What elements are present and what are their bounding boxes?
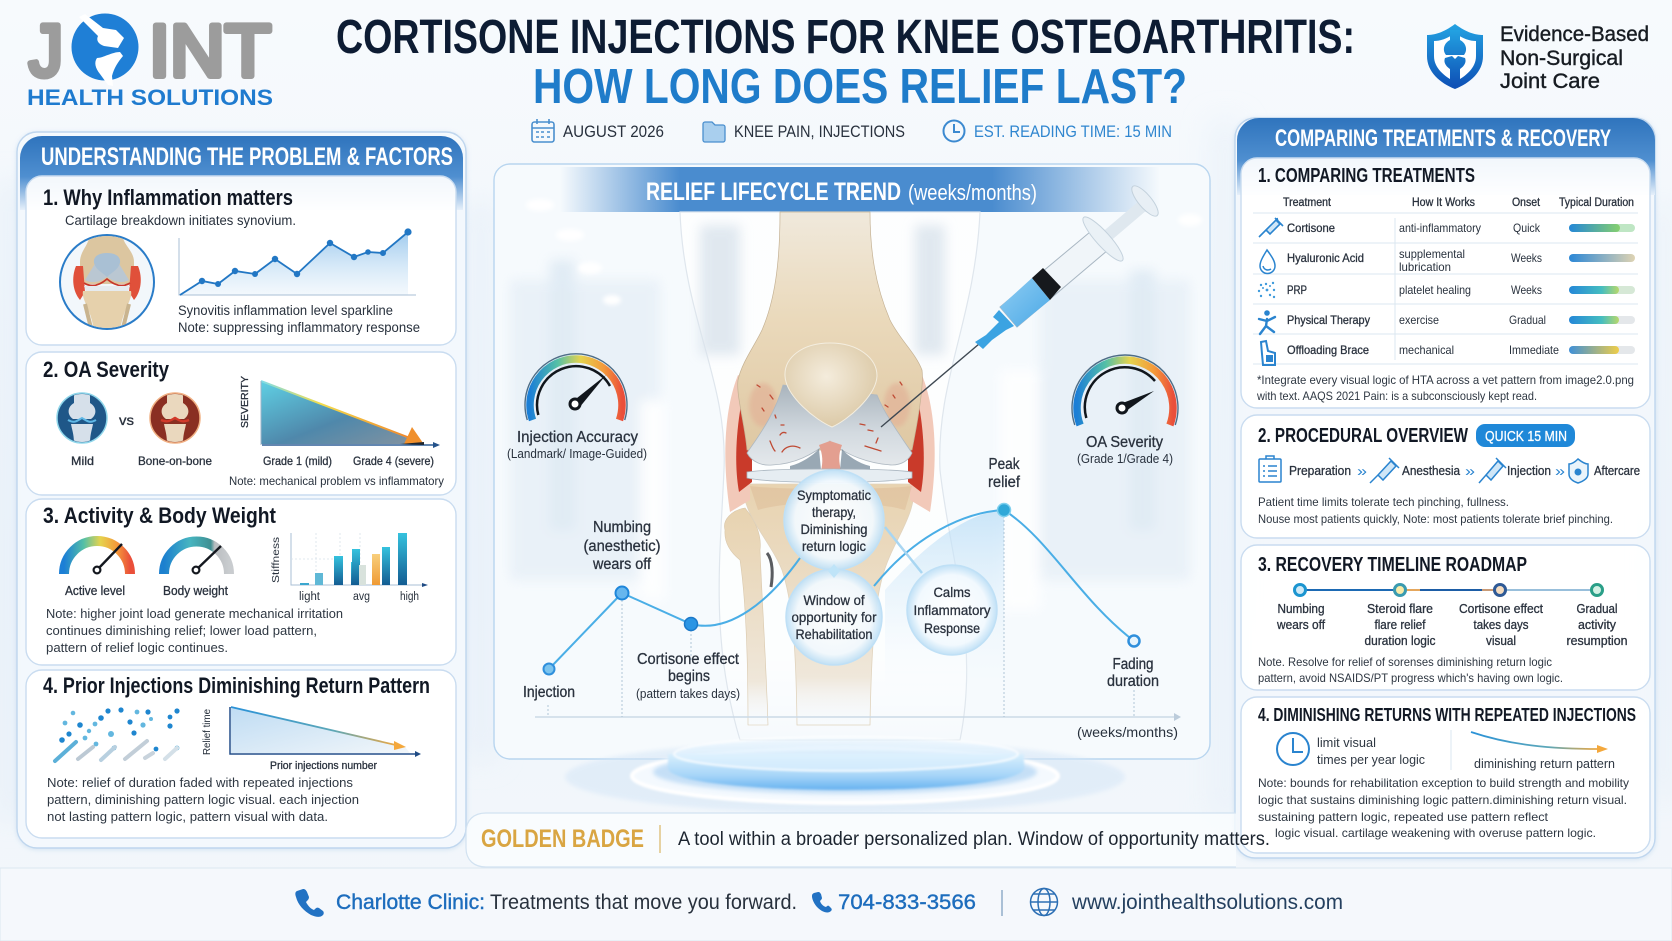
evidence-based badge <box>1427 23 1649 93</box>
label: numbing <box>584 519 660 573</box>
severity axis labels: Grade 1 (mild) <box>263 454 332 468</box>
gauge labels: Active level <box>65 584 125 598</box>
icon: globe <box>1030 888 1058 916</box>
golden badge callout <box>466 813 1270 867</box>
callout bubbles <box>784 470 997 665</box>
icon: clock <box>944 120 964 142</box>
timeline labels: wears off <box>1276 618 1325 632</box>
label: fading duration: duration <box>1107 673 1159 690</box>
bar chart axis labels: light <box>299 591 321 603</box>
activity note <box>46 606 343 655</box>
timeline labels: Steroid flare <box>1367 602 1433 616</box>
row: PRP: platelet healing <box>1399 283 1471 297</box>
knee labels <box>71 454 212 468</box>
severity chart <box>240 376 440 448</box>
row: offloading brace: Offloading Brace <box>1287 343 1369 357</box>
synovium red right <box>908 405 924 492</box>
date: AUGUST 2026 <box>563 123 664 141</box>
timeline labels: takes days <box>1474 618 1528 632</box>
timeline note: Note. Resolve for relief of sorenses diminishing return logic <box>1258 655 1552 669</box>
row: cortisone: Quick <box>1513 221 1541 235</box>
timeline labels: Numbing <box>1278 602 1325 616</box>
lifecycle heading: RELIEF LIFECYCLE TREND <box>646 178 901 206</box>
table column headers: Treatment <box>1283 197 1332 209</box>
fibula <box>724 508 768 725</box>
podium outer halo <box>565 741 1125 813</box>
gauge label: OA severity: (Grade 1/Grade 4) <box>1077 452 1173 466</box>
quick 15 min pill <box>1476 424 1575 447</box>
injection limit text: limit visual <box>1317 735 1376 750</box>
icon: shield with knee <box>1427 24 1483 89</box>
synovium pale left <box>725 375 750 512</box>
trend line <box>549 510 1134 669</box>
syringe liquid <box>1000 278 1050 327</box>
icon: folder <box>703 122 725 142</box>
bar chart: load level <box>271 533 428 587</box>
syringe flange <box>1078 213 1128 265</box>
label: cortisone effect <box>636 651 740 701</box>
bar chart: load level: Stiffness <box>271 537 282 583</box>
panel: relief lifecycle trend <box>494 164 1210 759</box>
procedural note <box>1258 495 1613 526</box>
bubble: window of opportunity: Window of <box>804 592 865 608</box>
tibia <box>743 484 914 725</box>
sparkline caption: Note: suppressing inflammatory response <box>178 320 420 335</box>
syringe black band <box>1032 268 1061 300</box>
bubble: calms inflammatory response <box>907 565 997 655</box>
bubble: symptomatic therapy: Diminishing <box>800 521 868 537</box>
timeline labels: duration logic <box>1364 634 1436 648</box>
bubble: window of opportunity: opportunity for <box>792 609 877 625</box>
label: peak relief <box>988 456 1021 491</box>
red speckles <box>757 382 902 452</box>
chevrons 2: » <box>1465 463 1475 480</box>
drop lines <box>548 516 1134 717</box>
card 4: prior injections <box>26 670 456 838</box>
label: numbing: (anesthetic) <box>584 538 660 555</box>
row: physical therapy: Physical Therapy <box>1287 313 1370 327</box>
icon: syringe <box>1259 218 1283 237</box>
gauge: OA severity <box>1072 355 1178 425</box>
bubble: calms inflammatory response: Response <box>924 620 980 636</box>
row: PRP <box>1258 282 1635 298</box>
step: anesthesia: Anesthesia <box>1402 463 1461 478</box>
prior injections note: Note: relief of duration faded with repeated injections <box>47 775 353 790</box>
row: physical therapy: exercise <box>1399 313 1439 327</box>
data point: numbing <box>616 586 628 600</box>
step: injection: Injection <box>1507 463 1551 478</box>
icon: calendar <box>532 119 554 142</box>
title line 2: HOW LONG DOES RELIEF LAST? <box>533 60 1187 114</box>
ligament <box>819 441 842 471</box>
row: cortisone: Cortisone <box>1287 221 1335 235</box>
badge text: Joint Care <box>1500 70 1600 93</box>
syringe plunger rod <box>1100 203 1146 242</box>
meniscus <box>747 469 912 482</box>
label: numbing: Numbing <box>593 519 651 536</box>
data point: fading <box>1128 636 1140 646</box>
icon: syringe injection <box>1479 458 1506 483</box>
badge label: GOLDEN BADGE <box>481 825 644 853</box>
diminishing returns chart: Relief time <box>202 709 213 755</box>
prior injections note: not lasting pattern logic, pattern visual with data. <box>47 809 328 824</box>
card 3 heading: 3. Activity & Body Weight <box>43 503 277 528</box>
bubble: calms inflammatory response: Inflammatory <box>914 602 990 618</box>
data point: peak <box>998 504 1010 516</box>
meta row <box>532 119 1172 142</box>
diminishing note: logic visual. cartilage weakening with overuse pattern logic. <box>1275 826 1596 840</box>
panel: understanding the problem and factors <box>17 132 466 848</box>
scattered injection dots <box>55 707 180 761</box>
table footnote: *Integrate every visual logic of HTA across a vet pattern from image2.0.png <box>1257 373 1634 387</box>
card 1: comparing treatments table <box>1241 158 1650 408</box>
card 2: OA severity <box>26 352 456 495</box>
bubble: symptomatic therapy <box>784 470 884 570</box>
icon: inflamed knee <box>60 232 154 332</box>
badge text: A tool within a broader personalized plan. Window of opportunity matters. <box>678 829 1270 850</box>
translucent soft tissue <box>680 212 980 740</box>
injection limit text: times per year logic <box>1317 752 1425 767</box>
activity note: continues diminishing relief; lower load pattern, <box>46 623 317 638</box>
label: cortisone effect: begins <box>668 668 710 685</box>
joint shadow <box>790 449 870 470</box>
activity note: pattern of relief logic continues. <box>46 640 228 655</box>
icon: bone-on-bone knee <box>150 392 200 444</box>
table heading: 1. COMPARING TREATMENTS <box>1258 165 1475 187</box>
table column headers <box>1283 197 1634 209</box>
phone number: 704-833-3566 <box>838 890 976 914</box>
icon: person exercising <box>1259 310 1275 334</box>
bubble: symptomatic therapy: return logic <box>802 538 866 554</box>
icon: phone large <box>295 889 324 917</box>
timeline labels: flare relief <box>1374 618 1426 632</box>
soft shading beside femur <box>700 225 945 355</box>
prior injections note <box>47 775 359 824</box>
card 3: recovery timeline roadmap <box>1241 545 1650 690</box>
severity note: Note: mechanical problem vs inflammatory <box>229 474 444 488</box>
row: cortisone <box>1259 218 1635 237</box>
row: PRP: PRP <box>1287 283 1307 297</box>
timeline labels: activity <box>1578 618 1617 632</box>
logo wordmark INT: INT <box>149 11 271 92</box>
gauge label: injection accuracy <box>507 429 647 461</box>
icon: knee brace <box>1261 341 1275 365</box>
clinic tagline: Treatments that move you forward. <box>490 891 797 914</box>
synovium red left <box>736 405 752 492</box>
data point: cortisone begins <box>684 618 698 630</box>
gauge label: injection accuracy: Injection Accuracy <box>517 429 638 446</box>
table column headers: Onset <box>1512 197 1541 209</box>
gauge labels <box>65 584 228 598</box>
gauge label: OA severity <box>1077 434 1173 466</box>
badge divider <box>659 825 661 853</box>
website: www.jointhealthsolutions.com <box>1071 891 1343 914</box>
syringe plunger cap <box>1128 182 1162 220</box>
curve labels <box>523 456 1178 740</box>
label: fading duration <box>1107 656 1159 690</box>
procedural heading: 2. PROCEDURAL OVERVIEW <box>1258 425 1468 447</box>
connector arrow <box>885 527 922 573</box>
icon: clock <box>1277 733 1309 765</box>
title line 1: CORTISONE INJECTIONS FOR KNEE OSTEOARTHRITIS: <box>336 11 1355 64</box>
timeline labels <box>1276 602 1628 648</box>
timeline graphic <box>1294 584 1602 596</box>
severity axis labels <box>263 454 434 468</box>
bubble: symptomatic therapy: therapy, <box>812 504 856 520</box>
row: physical therapy: Gradual <box>1509 313 1546 327</box>
procedure steps <box>1259 456 1640 483</box>
bubble: window of opportunity <box>786 569 882 665</box>
label: numbing: wears off <box>592 556 652 573</box>
timeline labels: Gradual <box>1576 602 1618 616</box>
cartilage <box>747 385 912 465</box>
row: cortisone: anti-inflammatory <box>1399 221 1481 235</box>
card 2 heading: 2. OA Severity <box>43 357 170 382</box>
row: hyaluronic acid <box>1260 247 1635 274</box>
glowing podium <box>565 737 1125 813</box>
logo knee circle <box>72 14 138 86</box>
severity chart: SEVERITY <box>240 376 251 428</box>
podium disc top <box>674 737 1018 771</box>
label: time axis: (weeks/months) <box>1077 724 1178 740</box>
illustration: syringe <box>881 182 1162 427</box>
icon: drop <box>1260 250 1275 274</box>
logo: Joint Health Solutions <box>27 11 273 110</box>
bubble: calms inflammatory response: Calms <box>934 584 970 600</box>
step: aftercare: Aftercare <box>1594 463 1640 478</box>
syringe nozzle <box>975 310 1014 349</box>
lifecycle header band <box>560 167 1160 212</box>
card 3: activity and body weight <box>26 499 456 665</box>
diminishing note: logic that sustains diminishing logic pattern.diminishing return visual. <box>1258 793 1627 807</box>
label: cortisone effect: (pattern takes days) <box>636 687 740 701</box>
gauge labels: Body weight <box>163 584 228 598</box>
peak shading <box>885 510 1004 717</box>
speckled femur inflammation <box>749 383 910 427</box>
label: cortisone effect: Cortisone effect <box>637 651 740 668</box>
clinic name: Charlotte Clinic: <box>336 891 485 914</box>
card 1: why inflammation matters <box>26 176 456 345</box>
logo wordmark letter J: J <box>29 11 63 92</box>
icon: syringe anesthesia <box>1370 458 1399 483</box>
needle <box>881 344 979 427</box>
relief trend curve <box>535 504 1181 721</box>
table column headers: How It Works <box>1412 197 1475 209</box>
panel: comparing treatments and recovery <box>1235 118 1655 858</box>
row: hyaluronic acid: Weeks <box>1511 251 1542 265</box>
chevrons 3: » <box>1555 463 1565 480</box>
label: peak relief: Peak <box>988 456 1020 473</box>
illustration: knee anatomy <box>680 212 980 740</box>
podium disc body <box>668 754 1024 790</box>
row: offloading brace: mechanical <box>1399 343 1454 357</box>
row: hyaluronic acid: lubrication <box>1399 260 1451 274</box>
activity note: Note: higher joint load generate mechanical irritation <box>46 606 343 621</box>
chart axis label: Prior injections number <box>270 760 377 772</box>
time axis <box>535 716 1175 718</box>
gauge label: OA severity: OA Severity <box>1086 434 1163 451</box>
quick 15 min pill: QUICK 15 MIN <box>1485 428 1567 445</box>
diminishing returns chart <box>202 707 421 757</box>
procedural note: Patient time limits tolerate tech pinching, fullness. <box>1258 495 1509 509</box>
card 2: procedural overview <box>1241 415 1650 538</box>
bubble: symptomatic therapy: Symptomatic <box>797 487 871 503</box>
bubble connector node <box>828 564 840 578</box>
patella <box>785 343 877 427</box>
curve caption: diminishing return pattern <box>1474 756 1615 771</box>
timeline note <box>1258 655 1563 685</box>
podium white ring <box>632 749 1058 803</box>
syringe barrel <box>1000 232 1108 327</box>
card 4 heading: 4. Prior Injections Diminishing Return Pattern <box>43 673 430 698</box>
timeline labels: resumption <box>1566 634 1628 648</box>
title <box>336 11 1355 114</box>
chevrons 1: » <box>1357 463 1367 480</box>
diminishing curve <box>1471 732 1608 753</box>
label: fading duration: Fading <box>1112 656 1154 673</box>
badge text: Non-Surgical <box>1500 47 1623 70</box>
timeline labels: visual <box>1486 634 1516 648</box>
tibial plate highlight <box>750 486 912 510</box>
row: PRP: Weeks <box>1511 283 1542 297</box>
table column headers: Typical Duration <box>1559 197 1634 209</box>
bar chart axis labels: high <box>400 591 419 603</box>
reading time: EST. READING TIME: 15 MIN <box>974 123 1172 141</box>
row: offloading brace <box>1261 341 1635 365</box>
label: peak relief: relief <box>988 474 1021 491</box>
podium shadow <box>653 750 1037 794</box>
right panel header band <box>1237 118 1655 195</box>
row: hyaluronic acid: Hyaluronic Acid <box>1287 251 1364 265</box>
diminishing note: sustaining pattern logic, repeated use pattern reflect <box>1258 810 1549 824</box>
card 4: diminishing returns <box>1241 697 1650 853</box>
vs label: vs <box>119 413 134 428</box>
diminishing note: Note: bounds for rehabilitation exception to build strength and mobility <box>1258 776 1629 790</box>
card 1 subheading: Cartilage breakdown initiates synovium. <box>65 213 296 228</box>
bar chart axis labels <box>299 591 419 603</box>
femur <box>738 212 922 450</box>
icon: aftercare shield <box>1569 459 1588 483</box>
table footnote: with text. AAQS 2021 Pain: is a subconsciously kept read. <box>1256 389 1537 403</box>
icon: platelets <box>1258 282 1275 298</box>
sparkline chart <box>179 228 416 295</box>
knee labels: Bone-on-bone <box>138 454 212 468</box>
gauge: body weight <box>164 542 229 574</box>
row: offloading brace: Immediate <box>1509 343 1559 357</box>
soft background blotches <box>0 120 1672 820</box>
logo tagline: HEALTH SOLUTIONS <box>27 85 273 110</box>
gauge: injection accuracy <box>525 354 627 420</box>
procedural note: Nouse most patients quickly, Note: most patients tolerate brief pinching. <box>1258 512 1613 526</box>
lifecycle heading: (weeks/months) <box>908 180 1037 205</box>
sparkline caption <box>178 303 420 335</box>
badge text <box>1500 23 1649 93</box>
footer <box>0 868 1672 941</box>
timeline note: pattern, avoid NSAIDS/PT progress which's having own logic. <box>1258 671 1563 685</box>
row: hyaluronic acid: supplemental <box>1399 247 1465 261</box>
table footnote <box>1256 373 1634 403</box>
gauge label: injection accuracy: (Landmark/ Image-Guided) <box>507 447 647 461</box>
knee labels: Mild <box>71 454 94 468</box>
bar chart axis labels: avg <box>353 591 370 603</box>
bubble: window of opportunity: Rehabilitation <box>796 626 872 642</box>
timeline labels: Cortisone effect <box>1459 602 1543 616</box>
diminishing note <box>1258 776 1629 840</box>
step: preparation: Preparation <box>1289 463 1351 478</box>
synovium pale right <box>910 375 935 512</box>
card 1 heading: 1. Why Inflammation matters <box>43 185 293 210</box>
label: injection: Injection <box>523 684 575 701</box>
severity axis labels: Grade 4 (severe) <box>353 454 434 468</box>
icon: mild knee <box>57 392 107 444</box>
gauge: active level <box>64 541 130 574</box>
dark gap between leg bones <box>767 553 772 587</box>
badge text: Evidence-Based <box>1500 23 1649 46</box>
row: physical therapy <box>1259 310 1635 334</box>
category: KNEE PAIN, INJECTIONS <box>734 123 905 141</box>
icon: clipboard <box>1259 456 1281 482</box>
sparkline caption: Synovitis inflammation level sparkline <box>178 303 393 318</box>
panel heading: UNDERSTANDING THE PROBLEM & FACTORS <box>41 143 453 171</box>
icon: phone small <box>812 892 832 912</box>
data point: injection <box>544 664 554 674</box>
panel header band <box>20 136 463 210</box>
injection limit text <box>1317 735 1425 767</box>
prior injections note: pattern, diminishing pattern logic visual. each injection <box>47 792 359 807</box>
timeline heading: 3. RECOVERY TIMELINE ROADMAP <box>1258 554 1527 576</box>
blurred clinic backdrop <box>510 199 1202 610</box>
